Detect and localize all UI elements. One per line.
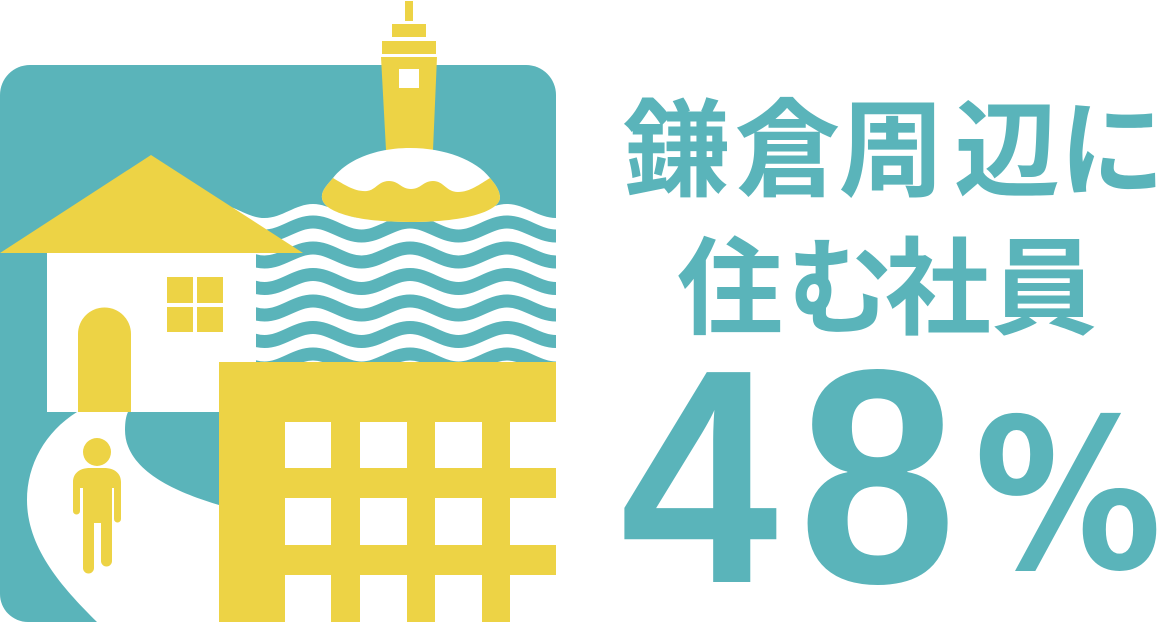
sea: white background with wavy top — [216, 204, 556, 362]
house door — [78, 308, 131, 412]
icon: island — [322, 148, 500, 222]
panel: teal background — [0, 65, 556, 622]
sea: teal wave stripes — [256, 216, 556, 362]
heading line 1: 鎌倉周辺に — [623, 93, 1159, 211]
heading line 2: 住む社員 — [677, 231, 1097, 349]
road — [27, 412, 219, 622]
building facade — [219, 362, 556, 622]
building — [219, 362, 556, 622]
illustration: Kamakura town — [0, 1, 556, 622]
house — [0, 155, 303, 412]
house roof — [0, 155, 303, 253]
house window — [167, 277, 223, 332]
building windows — [285, 422, 556, 622]
icon: person — [73, 438, 121, 574]
icon: lighthouse — [381, 1, 437, 150]
statistic: percent sign: % — [974, 374, 1159, 617]
house wall — [47, 252, 256, 412]
